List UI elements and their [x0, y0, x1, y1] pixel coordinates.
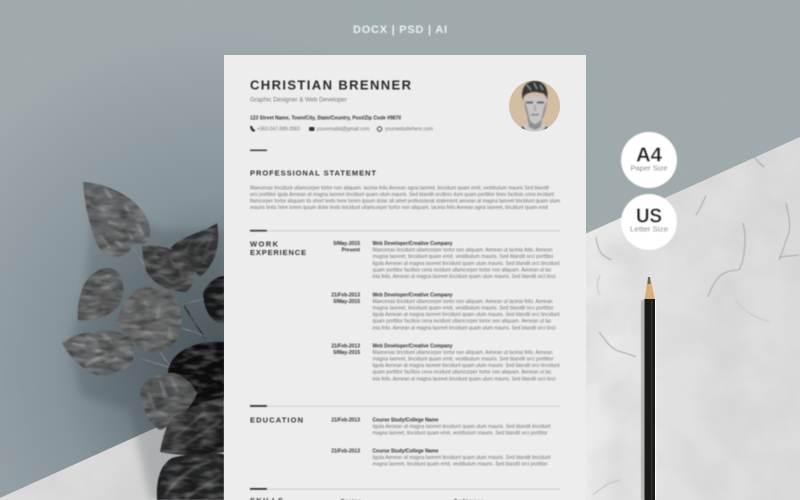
leaf: left small	[78, 268, 124, 320]
job entry 2: 21/Feb-2013	[331, 292, 360, 298]
badge: US letter size	[621, 194, 677, 250]
job entry 1	[333, 241, 560, 280]
icon: mail	[309, 127, 314, 131]
professional statement text: orci porttitor igula Aenean at magna laoreet tincidunt quam ulum mauris. Sed blandit orcitinci dunt quam porttitor lines facilisis cena incidunt	[250, 192, 555, 198]
education entry 2: magna laoreet, tincidunt quam emit, vestibulum mauris. Sed blandit orci porttitor	[372, 462, 548, 468]
soft plant shadow	[70, 200, 224, 500]
leaf: centre	[117, 286, 181, 353]
job entry 2: inia felis. Aenean at magna laoreet tincidunt quam ulum mauris. Sed blandit orci tinci	[372, 325, 556, 331]
job entry 1: Maecenas tincidunt ullamcorper tortor non aliquam. Aenean ut lacinia felis. Aenean	[372, 248, 553, 254]
icon: phone	[250, 126, 255, 132]
leaves	[62, 182, 224, 500]
leaf: bottom foreground	[157, 453, 224, 500]
job entry 3	[331, 343, 560, 382]
leaf: middle dark	[142, 246, 194, 292]
leaf: bottom dark	[160, 397, 224, 455]
badge: US letter size: Letter Size	[630, 226, 668, 234]
contact row: +960-047-989-3963	[257, 126, 300, 132]
education entry 1: magna laoreet, tincidunt quam emit, vestibulum mauris. Sed blandit orci porttitor	[372, 430, 548, 436]
badge: A4 paper size: Paper Size	[630, 166, 668, 172]
dark leaf mass	[168, 341, 224, 410]
work experience rule	[250, 230, 560, 232]
badge: US letter size: US	[636, 206, 662, 228]
professional statement text: Maecenas tincidunt ullamcorper tortor non aliquam. lacinia felis Aenean agna laoreet, tincidunt quam emit, vestibulum mauris Sed blandit	[250, 185, 550, 191]
education entry 1	[331, 417, 551, 436]
job entry 2: Maecenas tincidunt ullamcorper tortor non aliquam. Aenean ut lacinia felis. Aenean	[372, 299, 553, 305]
skills rule	[250, 488, 560, 490]
job entry 1: 5/May-2015	[333, 241, 360, 247]
education entry 2	[331, 448, 551, 468]
job entry 1: magna laoreet, tincidunt quam emit, vestibulum mauris. Sed blandit orci porttitor	[372, 254, 554, 260]
plant with variegated leaves	[62, 182, 224, 500]
leaf: dark right	[203, 276, 224, 324]
leaf: lower left	[62, 330, 134, 376]
job entry 2: ligula Aenean at magna laoreet tincidunt quam ulum mauris. Sed blandit orci tincidunt	[372, 312, 560, 318]
contact row	[250, 126, 433, 132]
short rule	[250, 150, 267, 151]
format heading: DOCX | PSD | AI	[353, 24, 447, 36]
cut-off skills headings	[250, 496, 484, 500]
badge: A4 paper size	[621, 132, 677, 188]
leaf: top large	[83, 182, 150, 257]
job entry 2: quam porttitor facilisis cena incidunt ullamcorper tortor non aliquam. Aenean ut lac	[372, 319, 552, 325]
background: marble surface	[0, 130, 800, 500]
education entry 2: Course Study/College Name	[372, 448, 439, 454]
leaf: lower grey	[140, 373, 197, 430]
job entry 1: Present	[342, 248, 360, 254]
job entry 2	[331, 292, 560, 331]
education heading: EDUCATION	[250, 416, 303, 425]
job entry 2: Web Developer/Creative Company	[372, 292, 453, 298]
leaf: upper right dark	[171, 223, 218, 277]
education entry 1: Course Study/College Name	[372, 417, 439, 423]
contact row: yourwebsitehere.com	[385, 126, 433, 132]
job entry 1: ligula Aenean at magna laoreet tincidunt quam ulum mauris. Sed blandit orci tincidunt	[372, 261, 560, 267]
job entry 3: inia felis. Aenean at magna laoreet tincidunt quam ulum mauris. Sed blandit orci tinci	[372, 376, 556, 382]
professional statement heading: PROFESSIONAL STATEMENT	[250, 168, 376, 177]
job entry 1: quam porttitor facilisis cena incidunt ullamcorper tortor non aliquam. Aenean ut lac	[372, 267, 552, 273]
leaf stems	[132, 247, 206, 372]
job entry 3: 5/May-2015	[333, 350, 360, 356]
job entry 3: magna laoreet, tincidunt quam emit, vestibulum mauris. Sed blandit orci porttitor	[372, 356, 554, 362]
badge: A4 paper size: A4	[636, 144, 663, 166]
education entry 2: ligula Aenean at magna laoreet tincidunt quam ulum mauris. Sed blandit tincidunt	[372, 455, 551, 461]
work experience heading: EXPERIENCE	[250, 248, 306, 257]
education rule	[250, 405, 560, 407]
job entry 1: inia felis. Aenean at magna laoreet tincidunt quam ulum mauris. Sed blandit orci tinci	[372, 274, 556, 280]
resume sheet	[224, 55, 586, 500]
job entry 3: 21/Feb-2013	[331, 343, 360, 349]
education entry 1: ligula Aenean at magna laoreet tincidunt quam ulum mauris. Sed blandit tincidunt	[372, 424, 551, 430]
education entry 1: 21/Feb-2013	[331, 417, 360, 423]
candidate name: CHRISTIAN BRENNER	[250, 78, 412, 92]
contact row: youremailid@gmail.com	[316, 126, 370, 132]
job entry 3: Maecenas tincidunt ullamcorper tortor non aliquam. Aenean ut lacinia felis. Aenean	[372, 350, 553, 356]
education entry 2: 21/Feb-2013	[331, 448, 360, 454]
job entry 3: ligula Aenean at magna laoreet tincidunt quam ulum mauris. Sed blandit orci tincidunt	[372, 363, 560, 369]
job entry 1: Web Developer/Creative Company	[372, 241, 453, 247]
portrait photo	[509, 80, 560, 132]
job title: Graphic Designer & Web Developer	[250, 96, 348, 104]
icon: website	[377, 127, 382, 131]
work experience heading: WORK	[250, 240, 279, 248]
professional statement text	[250, 185, 560, 211]
pencil	[641, 277, 656, 500]
address: 123 Street Name, Town/City, State/Country, Post/Zip Code #9870	[250, 116, 401, 122]
job entry 3: Web Developer/Creative Company	[372, 343, 453, 349]
job entry 2: magna laoreet, tincidunt quam emit, vestibulum mauris. Sed blandit orci porttitor	[372, 306, 554, 312]
job entry 3: quam porttitor facilisis cena incidunt ullamcorper tortor non aliquam. Aenean ut lac	[372, 370, 552, 376]
professional statement text: mauris texts here lorem ipsum dolar texts tincidunt ullamcorper tortor non aliquam. lacinia felis Aenean agna laoreet, tincidunt quam emit	[250, 205, 549, 211]
job entry 2: 5/May-2015	[333, 299, 360, 305]
professional statement text: llamcorper tortor aliquam its short texts here lorem ipsum dolar sit amet professional statement aenean at magna laoreet tincidunt quam ulum	[250, 198, 560, 204]
